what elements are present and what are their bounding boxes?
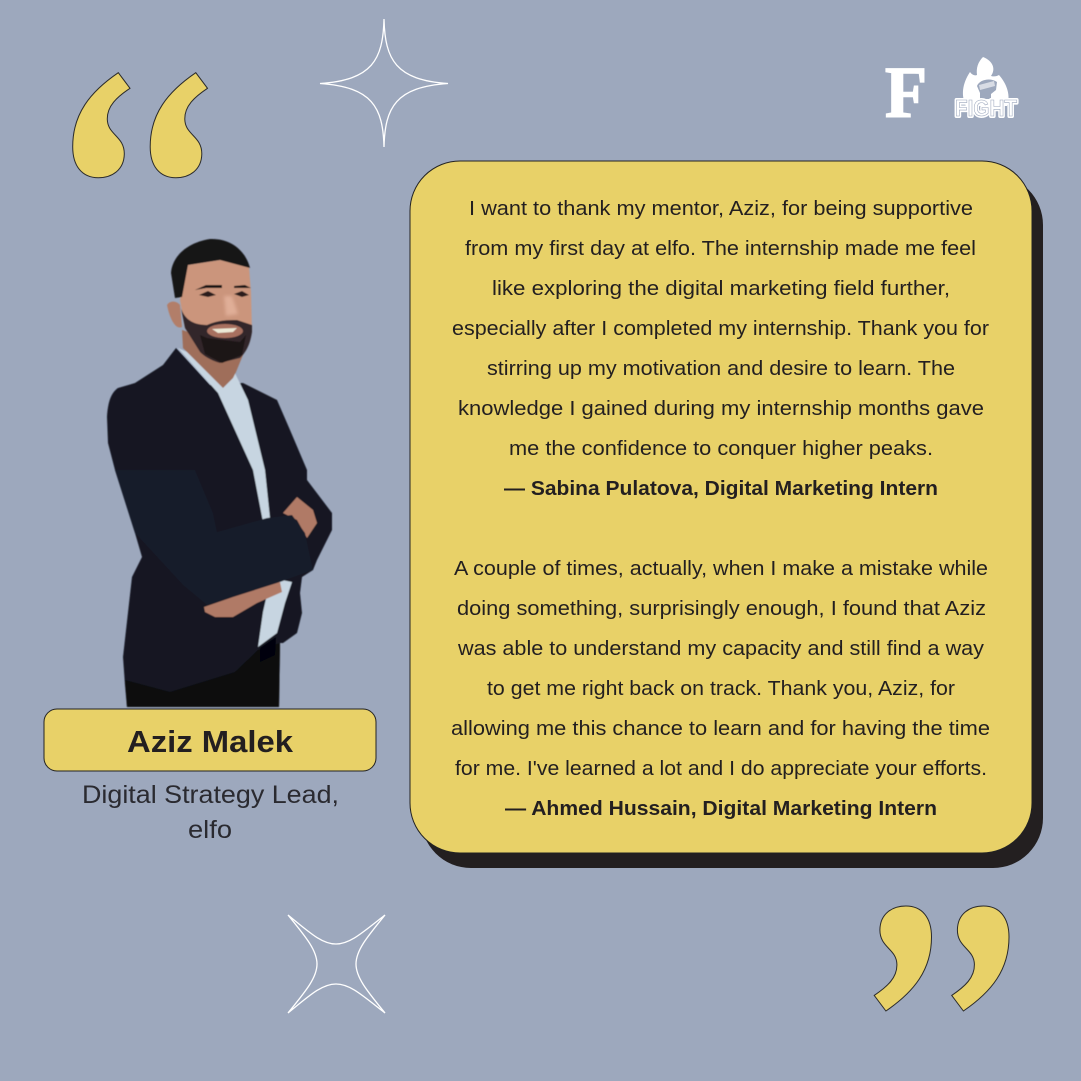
ear [167, 302, 182, 328]
name plate [44, 709, 376, 771]
testimonial one: knowledge I gained during my internship months gave [458, 398, 984, 420]
left eye [199, 291, 216, 297]
job title [82, 781, 339, 844]
wordmark inner: FIGHT [955, 95, 1017, 121]
beard [181, 308, 252, 363]
testimonial two: A couple of times, actually, when I make a mistake while [454, 558, 988, 580]
testimonial two: doing something, surprisingly enough, I found that Aziz [457, 598, 986, 620]
neck [182, 330, 245, 388]
testimonial two: to get me right back on track. Thank you, Aziz, for [487, 678, 955, 700]
teeth [212, 328, 237, 333]
icon: four-point star top [320, 19, 448, 147]
wordmark: FIGHT [955, 95, 1017, 121]
testimonial two [451, 558, 990, 820]
flame [963, 57, 1009, 106]
panel: testimonials [410, 161, 1032, 853]
testimonial one: I want to thank my mentor, Aziz, for being supportive [469, 198, 973, 220]
testimonial two: for me. I've learned a lot and I do appreciate your efforts. [455, 758, 987, 780]
job title: elfo [188, 816, 232, 844]
testimonial one: from my first day at elfo. The internship made me feel [465, 238, 976, 260]
job title: Digital Strategy Lead, [82, 781, 339, 809]
fist band [979, 81, 995, 90]
icon: four-point star bottom [288, 915, 385, 1013]
logo: FIGHT [955, 57, 1017, 121]
icon: opening quotation marks [73, 73, 208, 178]
testimonial one [452, 198, 989, 500]
shirt [178, 348, 270, 522]
icon: closing quotation marks [874, 906, 1009, 1011]
left brow [195, 285, 222, 290]
testimonial one: like exploring the digital marketing field further, [492, 278, 950, 300]
nose [224, 296, 238, 316]
testimonial two: was able to understand my capacity and still find a way [457, 638, 984, 660]
fist [977, 79, 997, 99]
testimonial two: — Ahmed Hussain, Digital Marketing Intern [505, 798, 937, 820]
chin beard [200, 335, 246, 363]
right brow [234, 285, 251, 288]
mouth area [207, 324, 243, 338]
belt [260, 637, 276, 662]
right eye [234, 291, 249, 297]
hair [171, 239, 250, 298]
name: Aziz Malek [127, 724, 294, 759]
upper hand [283, 497, 317, 538]
testimonial one: especially after I completed my internship. Thank you for [452, 318, 989, 340]
portrait: Aziz Malek [107, 239, 332, 707]
testimonial two: allowing me this chance to learn and for having the time [451, 718, 990, 740]
lower shirt [258, 580, 292, 647]
jacket [107, 348, 332, 707]
panel: shadow [421, 175, 1043, 868]
face [180, 260, 252, 363]
logo: F: F [885, 52, 927, 133]
trousers [125, 643, 280, 707]
testimonial one: me the confidence to conquer higher peaks. [509, 438, 933, 460]
lower hand [204, 582, 282, 617]
sleeve [115, 470, 313, 605]
testimonial one: stirring up my motivation and desire to learn. The [487, 358, 955, 380]
testimonial one: — Sabina Pulatova, Digital Marketing Intern [504, 478, 938, 500]
